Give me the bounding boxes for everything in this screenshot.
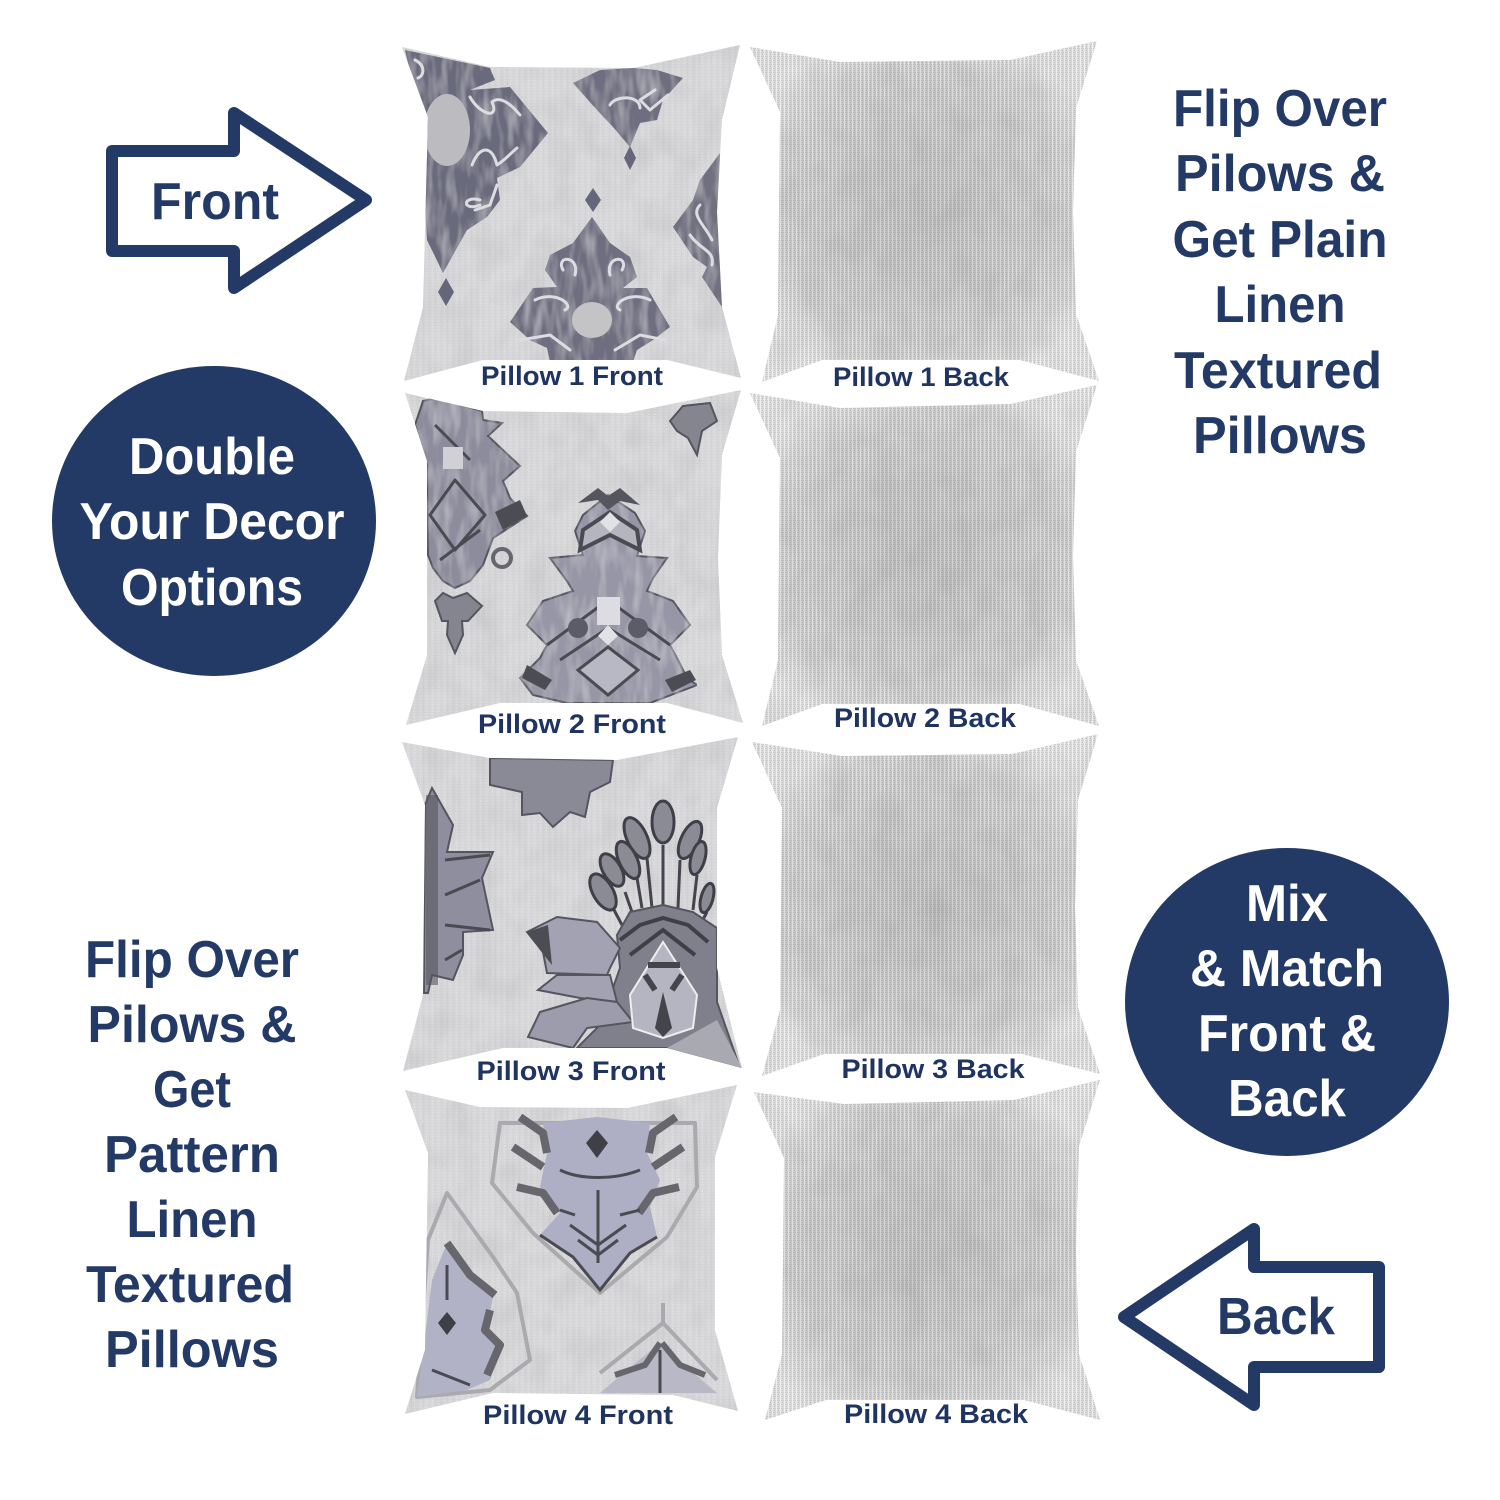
- label: Pillow 4 Front: Pillow 4 Front: [483, 1400, 673, 1430]
- badge text: Mix: [1246, 875, 1328, 933]
- label: Pillow 1 Front: Pillow 1 Front: [481, 361, 663, 391]
- label: Pillow 3 Front: Pillow 3 Front: [476, 1056, 666, 1086]
- pillow 3 front: [402, 737, 742, 1086]
- pillow 3 back: [752, 734, 1100, 1084]
- text block: Flip over for pattern linen: Linen: [126, 1191, 258, 1249]
- badge: Double Your Decor Options: [52, 366, 376, 676]
- label: Pillow 2 Back: Pillow 2 Back: [834, 703, 1017, 733]
- ikat motifs: [405, 50, 722, 362]
- text block: Flip over for plain linen: Flip Over: [1173, 80, 1387, 138]
- shading: [754, 1080, 1100, 1420]
- text block: Flip over for plain linen: Get Plain: [1172, 211, 1388, 269]
- text block: Flip over for pattern linen: Get: [153, 1061, 231, 1119]
- pillow 4 front: [405, 1085, 738, 1430]
- label: Pillow 1 Back: Pillow 1 Back: [833, 362, 1010, 392]
- shading: [752, 734, 1100, 1076]
- badge: Mix and Match: [1125, 848, 1449, 1156]
- pillow 2 front: [405, 390, 743, 739]
- badge text: [80, 428, 344, 617]
- badge text: Back: [1228, 1070, 1346, 1128]
- text block: Flip over for plain linen: [1172, 80, 1388, 465]
- text block: Flip over for plain linen: Textured: [1174, 342, 1382, 400]
- pillow 1 back: [750, 41, 1099, 392]
- text block: Flip over for pattern linen: Pillows: [105, 1321, 279, 1379]
- text block: Flip over for pattern linen: Flip Over: [85, 931, 299, 989]
- text block: Flip over for pattern linen: [85, 931, 299, 1379]
- tribal motifs: [415, 398, 717, 703]
- arrow label: Front: Front: [151, 173, 279, 231]
- badge text: [1190, 875, 1384, 1128]
- text block: Flip over for pattern linen: Textured: [86, 1256, 294, 1314]
- label: Pillow 4 Back: Pillow 4 Back: [844, 1399, 1029, 1429]
- badge text: Your Decor: [80, 493, 344, 551]
- text block: Flip over for pattern linen: Pattern: [104, 1126, 280, 1184]
- shading: [750, 41, 1099, 382]
- text block: Flip over for plain linen: Pilows &: [1175, 145, 1385, 203]
- pillow 4 back: [754, 1080, 1100, 1429]
- badge text: Front &: [1198, 1005, 1376, 1063]
- text block: Flip over for plain linen: Pillows: [1193, 407, 1367, 465]
- arrow label: Back: Back: [1217, 1288, 1335, 1346]
- label: Pillow 3 Back: Pillow 3 Back: [842, 1054, 1026, 1084]
- text block: Flip over for plain linen: Linen: [1214, 276, 1346, 334]
- badge text: Double: [129, 428, 295, 486]
- floral motifs: [424, 758, 742, 1068]
- damask motifs: [417, 1117, 717, 1397]
- text block: Flip over for pattern linen: Pilows &: [88, 996, 296, 1054]
- badge text: & Match: [1190, 940, 1384, 998]
- arrow: Front: [112, 113, 366, 288]
- arrow: Back: [1124, 1229, 1379, 1405]
- label: Pillow 2 Front: Pillow 2 Front: [478, 709, 666, 739]
- shading: [750, 385, 1099, 726]
- badge text: Options: [121, 559, 303, 617]
- pillow 2 back: [750, 385, 1099, 733]
- pillow 1 front: [402, 45, 741, 391]
